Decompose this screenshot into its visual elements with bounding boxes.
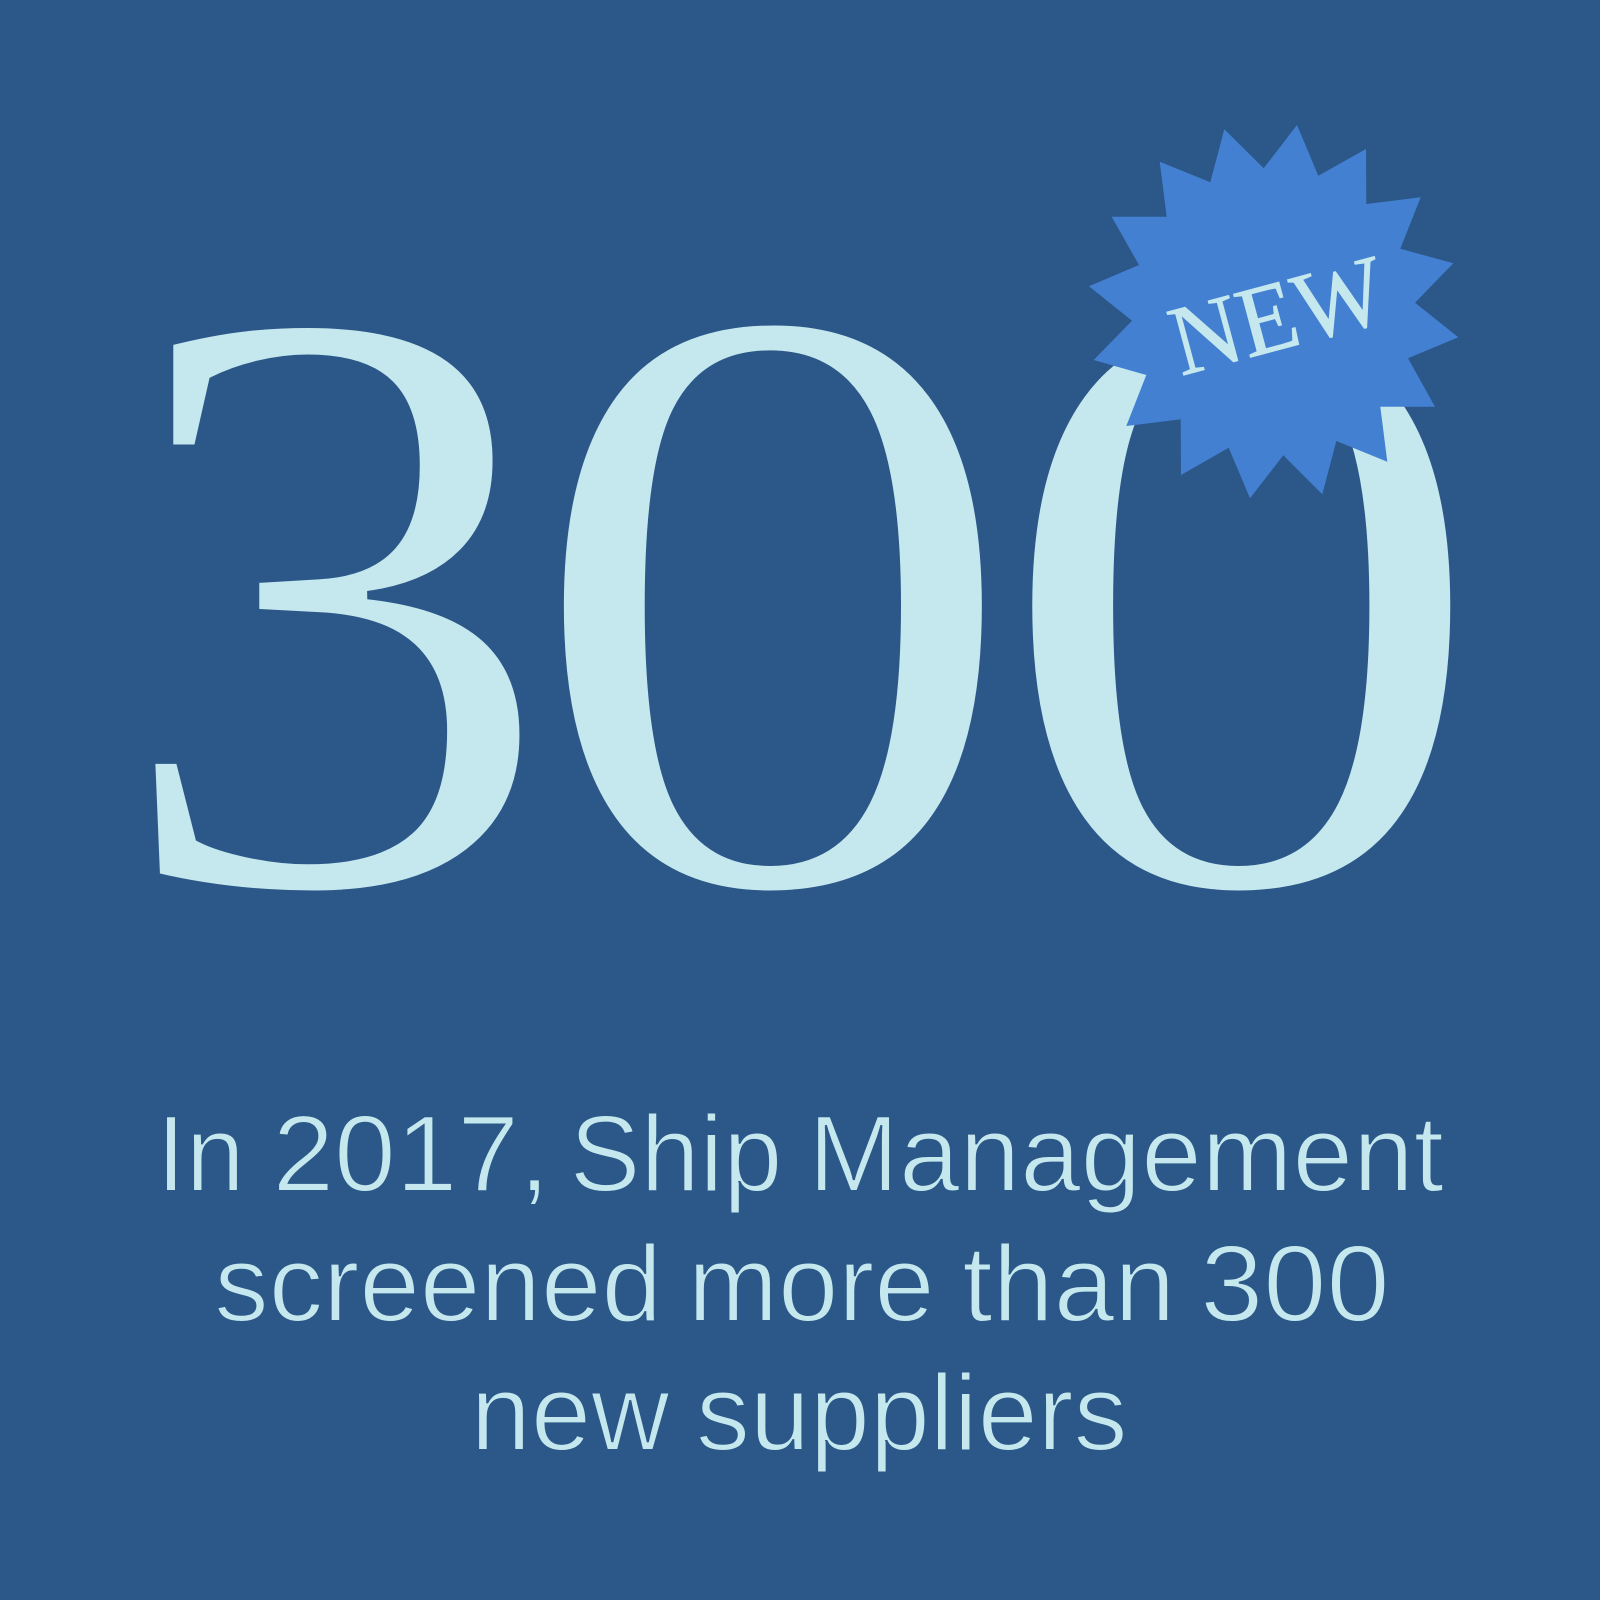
caption text: suppliers xyxy=(696,1352,1128,1474)
big number 300: 0 xyxy=(520,130,1025,1070)
big number 300: 0 xyxy=(989,130,1494,1070)
caption text: than xyxy=(962,1223,1175,1345)
starburst badge: NEW xyxy=(1089,125,1458,498)
badge label: NEW xyxy=(1158,233,1398,397)
caption text: 300 xyxy=(1200,1223,1390,1345)
caption text: In xyxy=(156,1093,245,1215)
caption text: Ship xyxy=(570,1093,782,1215)
caption text: screened xyxy=(214,1223,662,1345)
caption text xyxy=(156,1093,1444,1474)
caption text: new xyxy=(471,1352,670,1474)
big number 300: 3 xyxy=(108,130,559,1070)
caption text: more xyxy=(688,1223,935,1345)
icon: starburst xyxy=(1089,125,1458,498)
caption text: Management xyxy=(808,1093,1444,1215)
caption text: 2017, xyxy=(272,1093,550,1215)
big number 300 xyxy=(108,130,1494,1070)
